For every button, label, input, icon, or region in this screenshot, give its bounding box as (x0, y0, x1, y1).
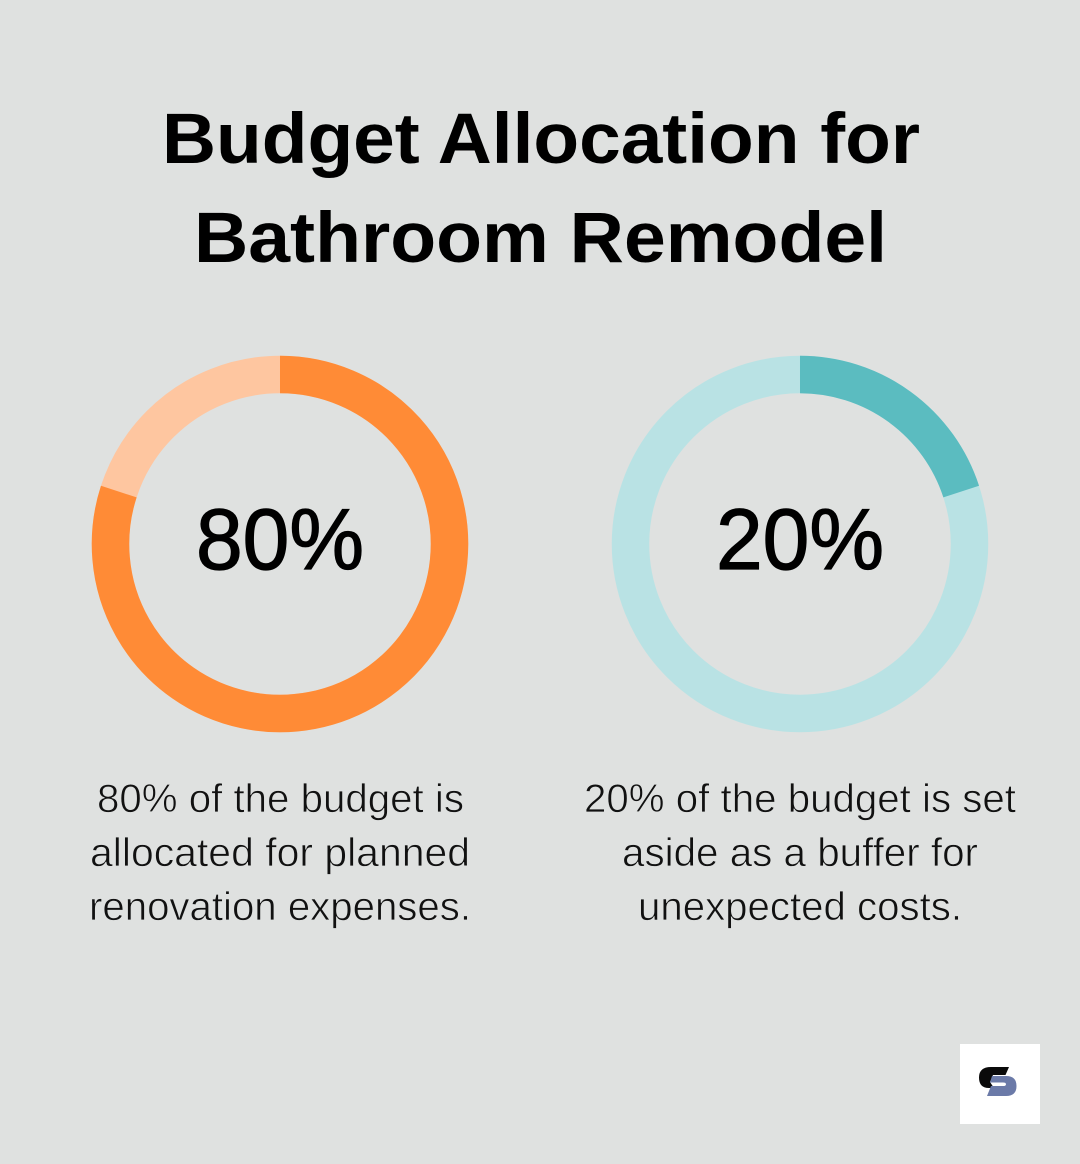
panel: planned expenses 80% (89, 374, 471, 929)
description: buffer: 20% of the budget is set (584, 777, 1016, 821)
description: buffer: unexpected costs. (638, 885, 962, 929)
icon: logo mark (979, 1067, 1016, 1096)
donut chart: 80% (110, 374, 449, 714)
donut chart: 20% (630, 374, 970, 714)
description: buffer (584, 777, 1016, 929)
description: planned expenses: allocated for planned (90, 831, 470, 875)
percentage: 80%: 80% (196, 492, 364, 588)
title: Bathroom Remodel (194, 199, 887, 278)
logo badge (960, 1044, 1040, 1124)
description: planned expenses: 80% of the budget is (97, 777, 464, 821)
description: buffer: aside as a buffer for (622, 831, 978, 875)
title: Budget Allocation for (162, 100, 920, 179)
percentage: 20%: 20% (716, 492, 884, 588)
description: planned expenses: renovation expenses. (89, 885, 471, 929)
description: planned expenses (89, 777, 471, 929)
panel: buffer 20% (584, 374, 1016, 929)
title (162, 100, 920, 278)
